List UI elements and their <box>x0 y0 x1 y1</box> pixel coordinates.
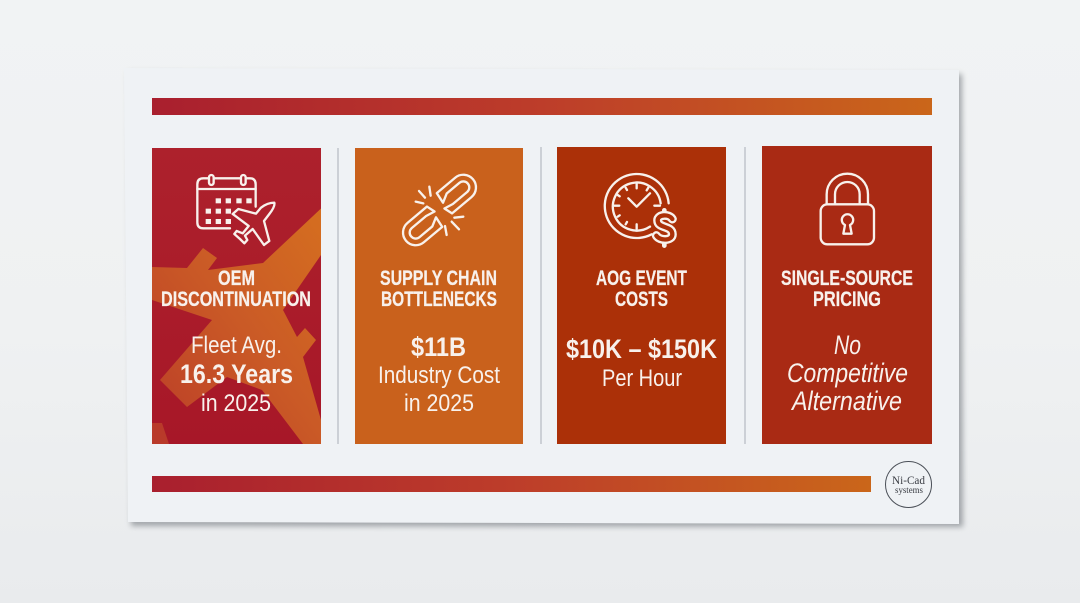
icon: calendar with airplane <box>197 175 274 245</box>
heading: OEM discontinuation <box>161 267 311 311</box>
heading: single-source pricing: SINGLE-SOURCE <box>781 267 913 290</box>
card <box>124 68 959 524</box>
icon: broken chain link <box>398 170 481 250</box>
icon: padlock <box>821 174 874 244</box>
divider <box>337 148 339 444</box>
logo: Ni-Cad systems: systems <box>895 485 923 495</box>
statement: no competitive alternative: Alternative <box>790 386 902 416</box>
airplane watermark <box>152 200 330 444</box>
heading: supply chain bottlenecks: SUPPLY CHAIN <box>380 267 497 290</box>
stat: fleet average age: Fleet Avg. <box>191 332 282 359</box>
heading: single-source pricing: PRICING <box>813 288 881 311</box>
stat: industry cost: in 2025 <box>404 390 474 417</box>
stat: cost per hour <box>566 334 717 392</box>
stat: industry cost: $11B <box>411 332 466 362</box>
statement: no competitive alternative: Competitive <box>787 358 908 388</box>
stat: industry cost <box>378 332 500 417</box>
logo: Ni-Cad systems: Ni-Cad <box>892 473 925 487</box>
heading: supply chain bottlenecks: BOTTLENECKS <box>381 288 497 311</box>
stat: industry cost: Industry Cost <box>378 362 500 389</box>
card shadow <box>128 72 963 527</box>
bottom gradient bar <box>152 476 871 492</box>
panel: AOG event costs <box>557 147 726 444</box>
statement: no competitive alternative: No <box>834 330 861 360</box>
stat: fleet average age: in 2025 <box>201 390 271 417</box>
heading: OEM discontinuation: OEM <box>218 267 255 290</box>
heading: AOG event costs: COSTS <box>615 288 668 311</box>
heading: single-source pricing <box>781 267 913 311</box>
stat: fleet average age <box>180 332 293 417</box>
panel: supply chain bottlenecks <box>355 148 523 444</box>
stat: cost per hour: Per Hour <box>602 365 682 392</box>
statement: no competitive alternative <box>787 330 908 416</box>
heading: supply chain bottlenecks <box>380 267 497 311</box>
icon: clock with dollar sign <box>605 174 672 246</box>
infographic <box>127 72 967 531</box>
stat: cost per hour: $10K – $150K <box>566 334 717 364</box>
top gradient bar <box>152 98 932 115</box>
panel: OEM discontinuation <box>152 148 330 444</box>
heading: AOG event costs: AOG EVENT <box>596 267 687 290</box>
logo: Ni-Cad systems <box>886 462 932 508</box>
heading: OEM discontinuation: DISCONTINUATION <box>161 288 311 311</box>
heading: AOG event costs <box>596 267 687 311</box>
divider <box>540 147 542 444</box>
panel: single-source pricing <box>762 146 932 444</box>
divider <box>744 147 746 444</box>
stat: fleet average age: 16.3 Years <box>180 359 293 389</box>
